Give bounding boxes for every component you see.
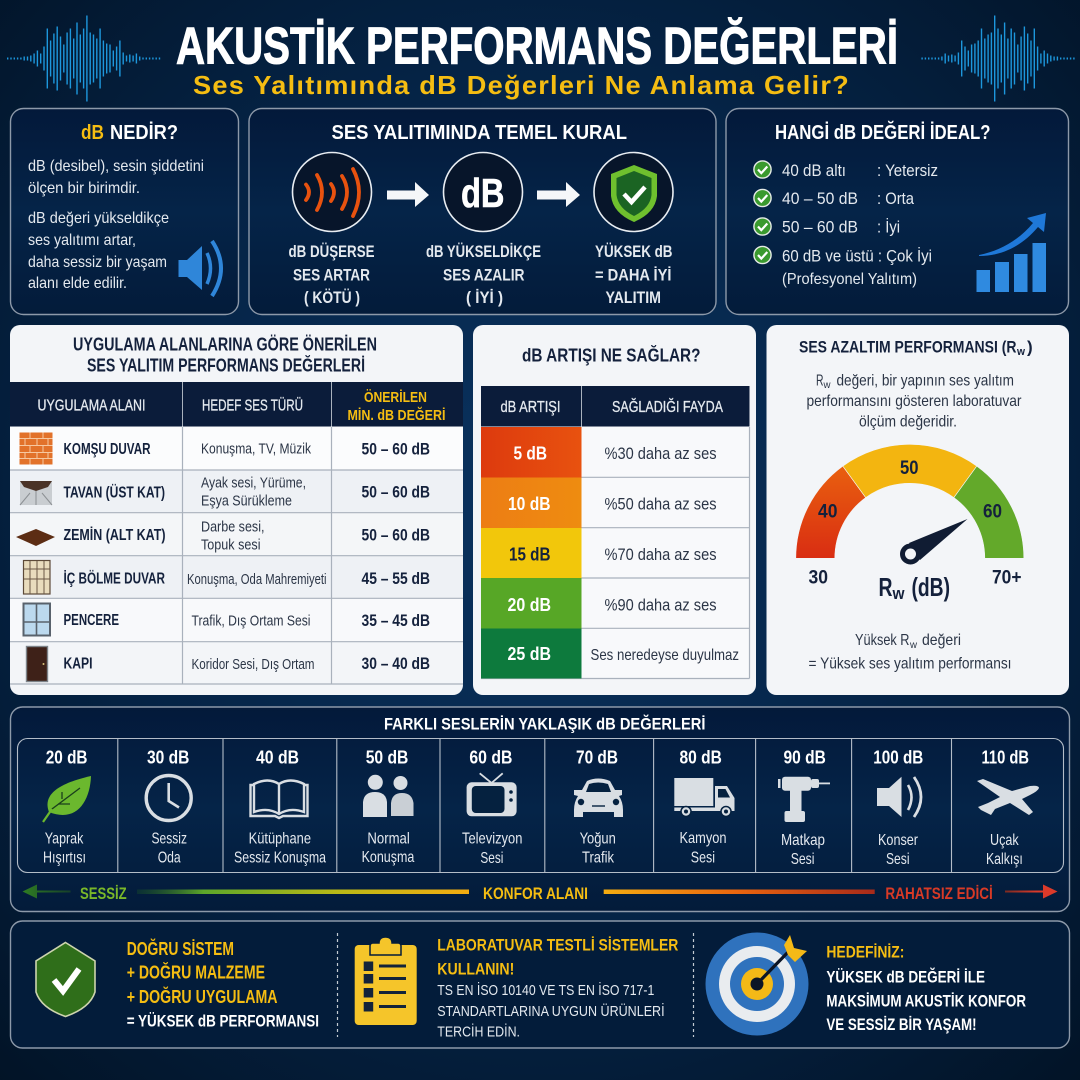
text block: laboratuvar: TERCİH EDİN. <box>437 1022 520 1040</box>
chart: gauge <box>796 444 1024 603</box>
icon: dB circle <box>444 152 522 232</box>
item: 20 dB: 20 dB <box>46 748 88 768</box>
item: 40 dB: 40 dB <box>256 748 299 768</box>
item: 90 dB: Sesi <box>791 851 814 868</box>
table header: MİN. dB DEĞERİ <box>348 406 446 424</box>
row: iç bölme duvar: 45 – 55 dB <box>362 569 430 588</box>
text block: hedefiniz: MAKSİMUM AKUSTİK KONFOR <box>826 992 1026 1010</box>
chart: gauge: 70+ <box>992 568 1022 588</box>
row: 10 dB: %50 daha az ses <box>604 494 716 514</box>
panel: sound levels <box>10 707 1070 912</box>
row: iç bölme duvar: Konuşma, Oda Mahremiyeti <box>187 571 326 588</box>
icons: check marks <box>754 161 771 264</box>
scale bar: green to yellow <box>137 890 469 894</box>
item: 30 dB: Oda <box>158 850 181 866</box>
arrow: first <box>387 182 429 207</box>
row: zemin: 50 – 60 dB <box>362 526 430 544</box>
icon: book <box>250 780 308 818</box>
text block: Rw note <box>808 632 1012 672</box>
text block: rating list: : İyi <box>877 218 900 236</box>
icon: leaf <box>43 776 91 822</box>
panel: Rw gauge <box>766 325 1069 695</box>
row: pencere: Trafik, Dış Ortam Sesi <box>192 612 310 630</box>
icon: car <box>574 778 623 817</box>
row: 15 dB: %70 daha az ses <box>604 545 716 564</box>
gauge label <box>878 572 950 603</box>
panel: dB nedir <box>10 108 238 314</box>
arrow: sessiz <box>22 884 70 898</box>
panel: application table <box>10 325 463 695</box>
icon: green shield <box>36 942 95 1016</box>
row: zemin: ZEMİN (ALT KAT) <box>64 526 166 544</box>
text block: yüksek dB: = DAHA İYİ <box>595 266 672 284</box>
icon: airplane <box>977 779 1039 815</box>
icon: speaker <box>178 241 221 296</box>
table rows <box>10 427 463 684</box>
item: 100 dB <box>873 748 923 868</box>
item: 60 dB <box>462 748 522 867</box>
row: zemin: Topuk sesi <box>201 536 260 554</box>
text block: hedefiniz <box>826 942 1026 1034</box>
item: 70 dB <box>574 748 623 866</box>
table header <box>10 382 463 426</box>
row: pencere: 35 – 45 dB <box>362 611 430 630</box>
text block: rating list: : Yetersiz <box>877 161 938 180</box>
icon: clipboard <box>355 937 417 1025</box>
icon: people <box>363 775 414 817</box>
text block: hedefiniz: YÜKSEK dB DEĞERİ İLE <box>826 968 985 986</box>
chart: gauge: 60 <box>983 502 1002 522</box>
text block: doğru sistem: + DOĞRU MALZEME <box>127 962 265 982</box>
text block: dB düşerse <box>288 242 374 307</box>
text block: definition <box>28 158 204 292</box>
icon: door <box>26 646 48 682</box>
row: komşu duvar: KOMŞU DUVAR <box>64 441 151 458</box>
text block: laboratuvar: LABORATUVAR TESTLİ SİSTEMLER <box>437 936 678 954</box>
item: 50 dB: 50 dB <box>366 748 408 768</box>
text block: definition: ses yalıtımı artar, <box>28 232 136 249</box>
icon: partition wall <box>24 560 50 594</box>
text block: definition: daha sessiz bir yaşam <box>28 254 167 271</box>
text block: dB yükseldikçe: SES AZALIR <box>443 266 524 284</box>
text block: Rw definition: değeri, bir yapının ses yalıtım <box>836 372 1014 390</box>
heading: sound levels: FARKLI SESLERİN YAKLAŞIK dB DEĞERLERİ <box>384 714 706 734</box>
text block: laboratuvar: TS EN İSO 10140 VE TS EN İSO 717-1 <box>437 981 654 999</box>
heading: dB artışı: dB ARTIŞI NE SAĞLAR? <box>522 344 700 366</box>
item: 60 dB: Sesi <box>480 850 503 867</box>
row: iç bölme duvar <box>24 560 430 594</box>
item: 110 dB: 110 dB <box>982 748 1029 768</box>
item: 60 dB: 60 dB <box>469 748 512 768</box>
subtitle: Ses Yalıtımında dB Değerleri Ne Anlama Gelir? <box>193 70 850 100</box>
item: 30 dB <box>146 748 191 866</box>
item: 90 dB: Matkap <box>781 832 825 849</box>
text block: definition: dB değeri yükseldikçe <box>28 210 169 227</box>
text block: rating list: : Orta <box>877 189 914 208</box>
heading: dB nedir <box>81 121 178 144</box>
panel: temel kural <box>249 108 716 314</box>
panel: ideal dB <box>726 108 1068 314</box>
text block: doğru sistem: = YÜKSEK dB PERFORMANSI <box>127 1012 319 1030</box>
row: 15 dB <box>481 528 716 578</box>
item: 20 dB: Hışırtısı <box>43 850 86 866</box>
row: 25 dB <box>481 628 739 678</box>
arrow: rahatsız <box>1005 884 1058 898</box>
item: 100 dB: Sesi <box>886 851 910 868</box>
text block: definition: alanı elde edilir. <box>28 275 127 292</box>
item: 50 dB: Konuşma <box>362 849 414 866</box>
item: 20 dB: Yaprak <box>45 830 84 848</box>
table header <box>481 386 750 426</box>
gauge label: R <box>878 572 893 602</box>
row: kapı: 30 – 40 dB <box>362 654 430 673</box>
row: zemin: Darbe sesi, <box>201 518 264 536</box>
text block: laboratuvar <box>437 936 678 1040</box>
text block: Rw note: değeri <box>922 632 961 649</box>
text block: definition: dB (desibel), sesin şiddetini <box>28 158 204 175</box>
icon: clock <box>146 776 191 820</box>
text block: rating list: 40 – 50 dB <box>782 189 858 208</box>
row: 10 dB: 10 dB <box>508 494 550 514</box>
item: 50 dB: Normal <box>367 830 410 848</box>
heading: temel kural: SES YALITIMINDA TEMEL KURAL <box>332 122 627 144</box>
text block: Rw note: Yüksek R <box>855 632 910 649</box>
scale bar: orange to red <box>604 890 875 894</box>
icon: ceiling <box>20 481 52 505</box>
panel: dB artışı <box>473 325 756 695</box>
sound table frame <box>18 738 1064 872</box>
icon: loudspeaker <box>877 777 921 817</box>
row: iç bölme duvar: İÇ BÖLME DUVAR <box>64 568 165 588</box>
item: 80 dB: Sesi <box>691 850 715 866</box>
item: 80 dB: 80 dB <box>680 748 722 768</box>
table header: ÖNERİLEN <box>364 389 427 406</box>
icon: target <box>706 932 808 1036</box>
text block: definition: ölçen bir birimdir. <box>28 180 140 197</box>
table header: SAĞLADIĞI FAYDA <box>612 397 723 416</box>
row: 20 dB: 20 dB <box>508 595 551 615</box>
icon: shield circle <box>594 152 673 232</box>
text block: Rw definition: performansını gösteren laboratuvar <box>806 393 1022 410</box>
icon: floor <box>16 529 55 546</box>
icon: left sound waveform <box>8 16 160 102</box>
item: 30 dB: 30 dB <box>147 748 189 768</box>
text block: laboratuvar: KULLANIN! <box>437 960 514 978</box>
gauge label: w <box>892 584 905 603</box>
item: 80 dB <box>674 748 734 866</box>
item: 110 dB: Kalkışı <box>986 851 1023 868</box>
row: komşu duvar: Konuşma, TV, Müzik <box>201 440 311 458</box>
text block: hedefiniz: HEDEFİNİZ: <box>826 942 904 962</box>
text block: doğru sistem <box>127 938 319 1030</box>
row: tavan: TAVAN (ÜST KAT) <box>64 482 165 502</box>
text block: dB yükseldikçe: ( İYİ ) <box>466 288 503 307</box>
row: 20 dB <box>481 578 716 628</box>
row: komşu duvar: 50 – 60 dB <box>362 440 430 458</box>
text block: Rw definition: R <box>816 372 824 390</box>
table header: dB ARTIŞI <box>500 399 560 416</box>
heading: dB nedir: dB <box>81 122 104 144</box>
icon: drill <box>778 777 830 822</box>
label: sessiz: SESSİZ <box>80 884 127 903</box>
row: tavan: Ayak sesi, Yürüme, <box>201 474 306 492</box>
item: 40 dB: Sessiz Konuşma <box>234 850 326 866</box>
label: rahatsız edici: RAHATSIZ EDİCİ <box>885 884 993 903</box>
item: 50 dB <box>362 748 414 866</box>
row: pencere: PENCERE <box>64 612 119 629</box>
arrow: second <box>537 182 580 207</box>
heading: application table: SES YALITIM PERFORMANS DEĞERLERİ <box>87 354 365 376</box>
chart: gauge: 50 <box>900 458 918 479</box>
row: 5 dB: 5 dB <box>514 444 547 464</box>
heading: ideal dB: HANGİ dB DEĞERİ İDEAL? <box>775 120 990 144</box>
icon: dB circle: dB <box>461 170 504 216</box>
text block: Rw definition: w <box>823 380 831 391</box>
text block: rating list: 60 dB ve üstü : Çok İyi <box>782 246 932 266</box>
divider: dashed <box>338 933 694 1037</box>
heading: Rw: ) <box>1027 338 1033 356</box>
item: 90 dB <box>778 748 830 868</box>
item: 60 dB: Televizyon <box>462 830 522 848</box>
text block: Rw note: = Yüksek ses yalıtım performansı <box>808 656 1012 672</box>
icon: window <box>24 604 50 636</box>
row backgrounds <box>481 427 750 678</box>
row: tavan: 50 – 60 dB <box>362 482 430 502</box>
text block: yüksek dB: YÜKSEK dB <box>595 242 672 261</box>
heading: Rw: w <box>1016 346 1025 358</box>
row: tavan <box>20 474 430 510</box>
chart: gauge: 30 <box>808 568 828 588</box>
text block: hedefiniz: VE SESSİZ BİR YAŞAM! <box>826 1015 977 1034</box>
row: kapı <box>26 646 430 682</box>
text block: dB düşerse: SES ARTAR <box>293 266 370 284</box>
item: 90 dB: 90 dB <box>784 748 826 768</box>
item: 110 dB <box>977 748 1039 868</box>
text block: rating list <box>782 161 938 288</box>
text block: rating list: 40 dB altı <box>782 161 846 180</box>
item: 70 dB: Trafik <box>582 850 615 866</box>
text block: laboratuvar: STANDARTLARINA UYGUN ÜRÜNLERİ <box>437 1002 665 1020</box>
table header: UYGULAMA ALANI <box>38 398 146 414</box>
row: 5 dB: %30 daha az ses <box>604 444 716 463</box>
gauge needle <box>902 519 968 562</box>
icon: brick wall <box>20 432 52 464</box>
row: kapı: Koridor Sesi, Dış Ortam <box>192 656 314 673</box>
row: 20 dB: %90 daha az ses <box>604 596 716 614</box>
text block: Rw definition <box>806 372 1022 430</box>
table header: HEDEF SES TÜRÜ <box>202 396 303 414</box>
icon: right sound waveform <box>922 16 1074 102</box>
heading: application table: UYGULAMA ALANLARINA GÖRE ÖNERİLEN <box>73 334 377 354</box>
text block: yüksek dB <box>595 242 672 307</box>
heading: application table <box>73 334 377 376</box>
item: 110 dB: Uçak <box>990 832 1019 849</box>
row: kapı: KAPI <box>64 656 92 672</box>
row: 10 dB <box>481 478 716 528</box>
text block: rating list: 50 – 60 dB <box>782 218 858 236</box>
text block: Rw definition: ölçüm değeridir. <box>859 414 957 430</box>
item: 30 dB: Sessiz <box>152 830 187 848</box>
text block: doğru sistem: DOĞRU SİSTEM <box>127 938 234 959</box>
row: komşu duvar <box>20 432 430 464</box>
chart icon: rising bars <box>976 213 1046 292</box>
text block: dB yükseldikçe <box>426 242 541 307</box>
item: 40 dB <box>234 748 326 866</box>
row: 5 dB <box>481 427 716 478</box>
row: 15 dB: 15 dB <box>509 544 550 564</box>
chart: gauge: 40 <box>818 502 838 522</box>
text block: doğru sistem: + DOĞRU UYGULAMA <box>127 986 278 1007</box>
label: konfor alanı: KONFOR ALANI <box>483 884 588 903</box>
row: tavan: Eşya Sürükleme <box>201 492 292 510</box>
text block: rating list: (Profesyonel Yalıtım) <box>782 271 917 288</box>
row: pencere <box>24 604 430 636</box>
heading: Rw: SES AZALTIM PERFORMANSI (R <box>799 338 1016 356</box>
panel: bottom tips <box>10 921 1070 1048</box>
icon: truck <box>674 778 734 816</box>
text block: yüksek dB: YALITIM <box>606 288 661 307</box>
text block: Rw note: w <box>909 640 918 651</box>
icon: television <box>467 773 517 816</box>
item: 100 dB: Konser <box>878 832 919 849</box>
text block: dB düşerse: ( KÖTÜ ) <box>304 288 360 307</box>
row: 25 dB: Ses neredeyse duyulmaz <box>590 647 739 664</box>
item: 20 dB <box>43 748 91 866</box>
item: 70 dB: Yoğun <box>580 830 616 848</box>
item: 80 dB: Kamyon <box>680 830 726 847</box>
item: 40 dB: Kütüphane <box>249 830 311 848</box>
row: zemin <box>16 518 430 554</box>
item: 70 dB: 70 dB <box>576 748 618 768</box>
text block: dB düşerse: dB DÜŞERSE <box>288 242 374 261</box>
icon: sound waves circle <box>292 152 372 232</box>
heading: dB nedir: NEDİR? <box>110 121 178 144</box>
text block: dB yükseldikçe: dB YÜKSELDİKÇE <box>426 242 541 261</box>
row: 25 dB: 25 dB <box>508 644 551 664</box>
item: 100 dB: 100 dB <box>873 748 923 768</box>
gauge label: (dB) <box>912 572 950 602</box>
